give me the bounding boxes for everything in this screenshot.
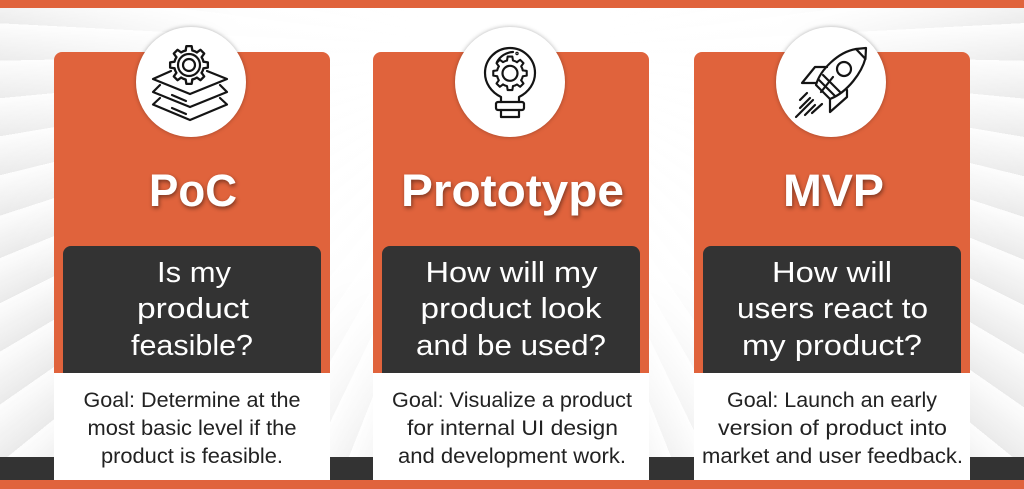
card background bbox=[54, 52, 330, 480]
goal text block: market and user feedback. bbox=[702, 445, 963, 468]
goal text block bbox=[54, 373, 330, 480]
goal text block: for internal UI design bbox=[407, 417, 618, 440]
question panel: How will bbox=[772, 257, 892, 289]
icon: light bulb with gear bbox=[455, 27, 565, 137]
question panel bbox=[63, 246, 321, 373]
goal text block: Goal: Visualize a product bbox=[392, 389, 632, 412]
top orange band bbox=[0, 0, 1024, 8]
panel: PoC bbox=[54, 27, 330, 480]
panel: Prototype bbox=[373, 27, 649, 480]
goal text block: version of product into bbox=[718, 417, 947, 440]
bottom dark band bbox=[0, 457, 1024, 480]
question panel: users react to bbox=[737, 293, 928, 325]
question panel bbox=[703, 246, 961, 373]
card background bbox=[694, 52, 970, 480]
icon: gear on layers bbox=[136, 27, 246, 137]
goal text block: and development work. bbox=[398, 445, 626, 468]
question panel: my product? bbox=[742, 330, 922, 362]
goal text block: Goal: Launch an early bbox=[727, 389, 938, 412]
goal text block bbox=[373, 373, 649, 480]
question panel: How will my bbox=[426, 257, 598, 289]
card background bbox=[373, 52, 649, 480]
goal text block: product is feasible. bbox=[101, 445, 283, 468]
goal text block bbox=[694, 373, 970, 480]
heading: MVP: MVP bbox=[783, 165, 884, 216]
goal text block: most basic level if the bbox=[88, 417, 296, 440]
bottom orange band bbox=[0, 480, 1024, 489]
question panel: and be used? bbox=[416, 330, 606, 362]
question panel bbox=[382, 246, 640, 373]
icon: rocket bbox=[776, 27, 886, 137]
heading: PoC: PoC bbox=[149, 165, 237, 216]
goal text block: Goal: Determine at the bbox=[84, 389, 300, 412]
question panel: product bbox=[137, 293, 249, 325]
question panel: Is my bbox=[157, 257, 232, 289]
question panel: product look bbox=[420, 293, 602, 325]
panel: MVP bbox=[694, 27, 970, 480]
heading: Prototype: Prototype bbox=[401, 165, 624, 216]
question panel: feasible? bbox=[131, 330, 253, 362]
